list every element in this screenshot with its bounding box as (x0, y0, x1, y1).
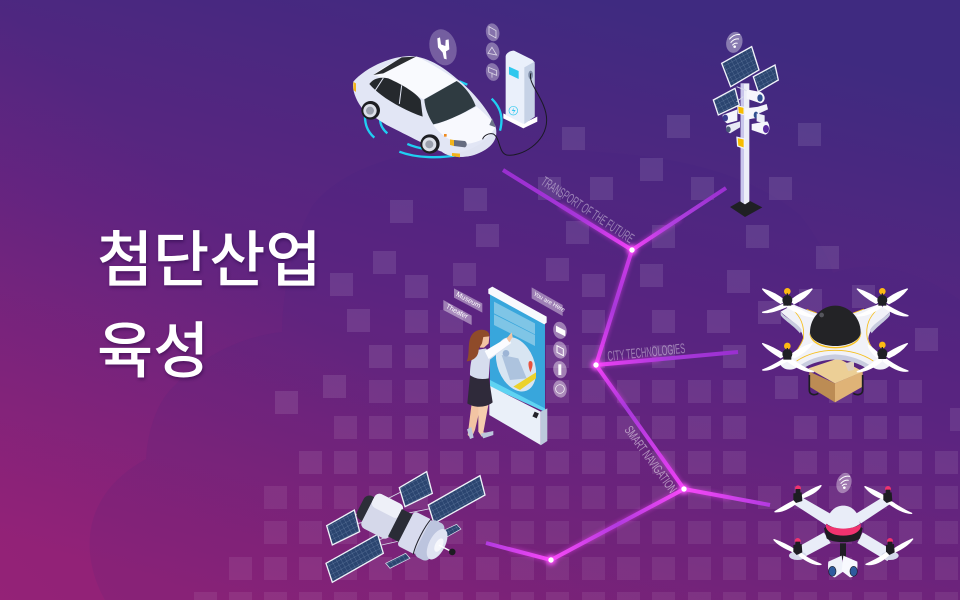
floating label tags (443, 287, 566, 325)
icons: charger menu (484, 22, 501, 82)
illustration: smart pole with solar panels and cameras (713, 30, 778, 217)
label: transport of the future: TRANSPORT OF THE FUTURE (538, 173, 637, 246)
charging cable (483, 73, 547, 155)
solar panel struts (355, 492, 448, 545)
title: second line: 육성 (97, 317, 209, 385)
tag: museum: Museum (455, 291, 482, 310)
car body (353, 56, 496, 157)
security cameras (723, 89, 769, 148)
solar panels (713, 47, 778, 115)
background cloud silhouette (90, 148, 960, 600)
network nodes (546, 245, 689, 565)
drone dome body (824, 506, 863, 542)
illustration: camera drone (774, 471, 913, 577)
kiosk (488, 287, 547, 445)
label: city technologies: CITY TECHNOLOGIES (607, 340, 686, 364)
icon: wifi bubble (724, 30, 745, 55)
illustration: delivery drone with box (763, 288, 908, 402)
solar panels (326, 472, 485, 582)
illustration: electric car and charger (353, 22, 547, 157)
illustration: satellite (326, 472, 485, 582)
drone camera (828, 543, 858, 577)
icon: plug bubble (425, 26, 461, 68)
tag: you are here: You are Here (532, 291, 566, 314)
icons: kiosk menu (552, 320, 568, 399)
title: first line: 첨단산업 (97, 226, 321, 294)
pole (730, 83, 762, 217)
drone body (781, 304, 890, 370)
drone rotors (774, 485, 913, 565)
charging station (503, 51, 537, 128)
cardboard box (808, 358, 863, 402)
satellite body (351, 487, 465, 572)
icon: wifi bubble (834, 471, 854, 495)
label: smart navigation: SMART NAVIGATION (622, 423, 680, 496)
network connector lines (486, 170, 770, 560)
woman (467, 330, 513, 439)
tag: theater: Theater (444, 303, 470, 321)
illustration: woman at interactive kiosk (443, 287, 568, 445)
background grid of translucent squares (275, 115, 938, 414)
rotors (763, 288, 908, 372)
car sensor waves (365, 81, 502, 157)
drone arms (789, 496, 899, 561)
